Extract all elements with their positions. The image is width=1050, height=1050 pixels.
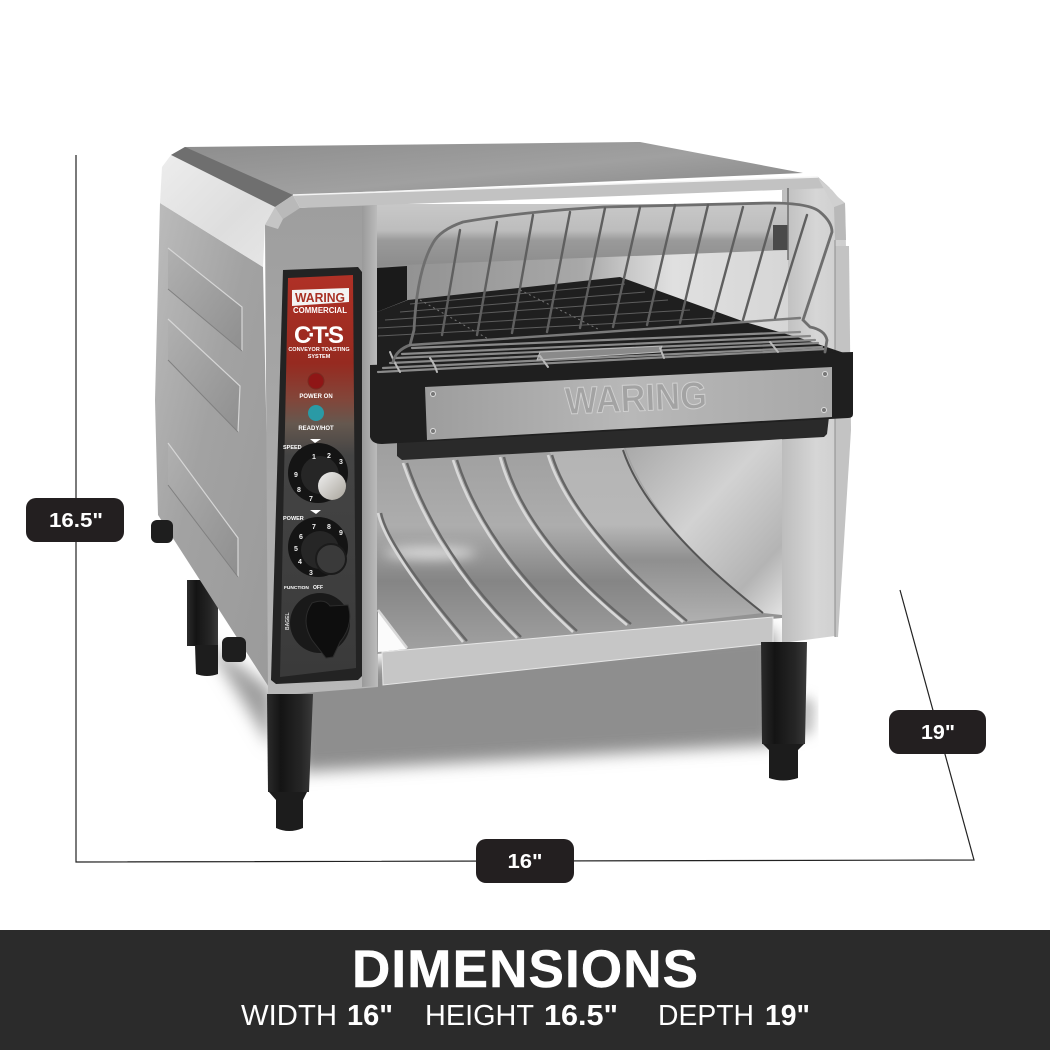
CTS subtitle: SYSTEM — [308, 354, 331, 360]
width dimension badge: 16" — [508, 851, 542, 873]
teal ready lamp — [308, 405, 324, 421]
speed knob: 1 — [312, 454, 316, 461]
power knob: 7 — [312, 524, 316, 531]
black front tray — [370, 352, 853, 460]
right column — [782, 180, 851, 643]
speed knob: 2 — [327, 453, 331, 460]
power pointer — [310, 510, 321, 514]
CTS heading: C·T·S — [294, 322, 344, 349]
depth dimension badge: 19" — [921, 722, 955, 744]
conveyor rack — [378, 332, 825, 372]
upper opening — [377, 204, 853, 370]
product: conveyor toaster — [151, 142, 853, 831]
wire rack back — [393, 203, 832, 362]
power knob: 9 — [339, 530, 343, 537]
footer specs: DEPTH — [658, 1000, 754, 1032]
front lip — [382, 617, 773, 685]
height dimension badge — [26, 498, 124, 542]
rear feet bumpers — [151, 520, 246, 662]
red power lamp — [308, 373, 324, 389]
speed knob — [288, 443, 348, 503]
front corner pieces — [265, 195, 300, 229]
footer specs: 16" — [347, 1000, 393, 1032]
plate screws — [430, 372, 828, 434]
speed knob: 8 — [297, 487, 301, 494]
power knob: 5 — [294, 546, 298, 553]
lower chute — [377, 440, 782, 654]
speed label: SPEED — [283, 445, 302, 451]
speed knob: 7 — [309, 496, 313, 503]
side top bevel — [160, 155, 275, 267]
front left column — [265, 203, 378, 696]
top dark bevel strip — [171, 147, 293, 207]
function knob: BAGEL — [285, 612, 291, 630]
dimension lines — [76, 155, 974, 862]
plate logo: WARING — [564, 375, 708, 423]
rack rail — [393, 203, 832, 362]
power knob: 4 — [298, 559, 302, 566]
side embossed strips — [168, 248, 242, 577]
height dimension badge: 16.5" — [49, 510, 103, 532]
brand logo — [292, 288, 349, 315]
footer specs: HEIGHT — [425, 1000, 534, 1032]
power knob: 6 — [299, 534, 303, 541]
brand logo: WARING — [295, 290, 345, 305]
power on label: POWER ON — [299, 394, 333, 400]
off label: OFF — [313, 585, 323, 591]
speed pointer — [310, 439, 321, 443]
power knob — [288, 517, 348, 577]
footer title: DIMENSIONS — [352, 940, 698, 999]
brand logo: COMMERCIAL — [293, 306, 347, 315]
CTS subtitle: CONVEYOR TOASTING — [288, 347, 350, 353]
control panel — [271, 267, 362, 684]
speed knob: 9 — [294, 472, 298, 479]
top surface — [171, 142, 803, 207]
rear left leg — [187, 580, 218, 676]
chute highlight — [384, 547, 476, 559]
footer band — [0, 930, 1050, 1050]
floor shadow — [205, 630, 814, 772]
tray plate — [425, 367, 832, 440]
ready label: READY/HOT — [298, 426, 334, 432]
footer specs: 16.5" — [544, 1000, 618, 1032]
power label: POWER — [283, 516, 304, 522]
side panel — [155, 203, 272, 692]
power knob: 3 — [309, 570, 313, 577]
front left leg — [267, 694, 313, 831]
power knob: 8 — [327, 524, 331, 531]
front right leg — [761, 642, 807, 780]
footer specs: 19" — [765, 1000, 810, 1032]
function knob — [285, 593, 350, 658]
footer specs — [241, 1000, 810, 1032]
column inner right strip — [362, 205, 378, 687]
depth dimension badge — [889, 710, 986, 754]
width dimension badge — [476, 839, 574, 883]
footer specs: WIDTH — [241, 1000, 337, 1032]
function label: FUNCTION — [284, 585, 309, 591]
speed knob: 3 — [339, 459, 343, 466]
top front bar — [293, 177, 843, 260]
CTS subtitle — [288, 347, 350, 360]
